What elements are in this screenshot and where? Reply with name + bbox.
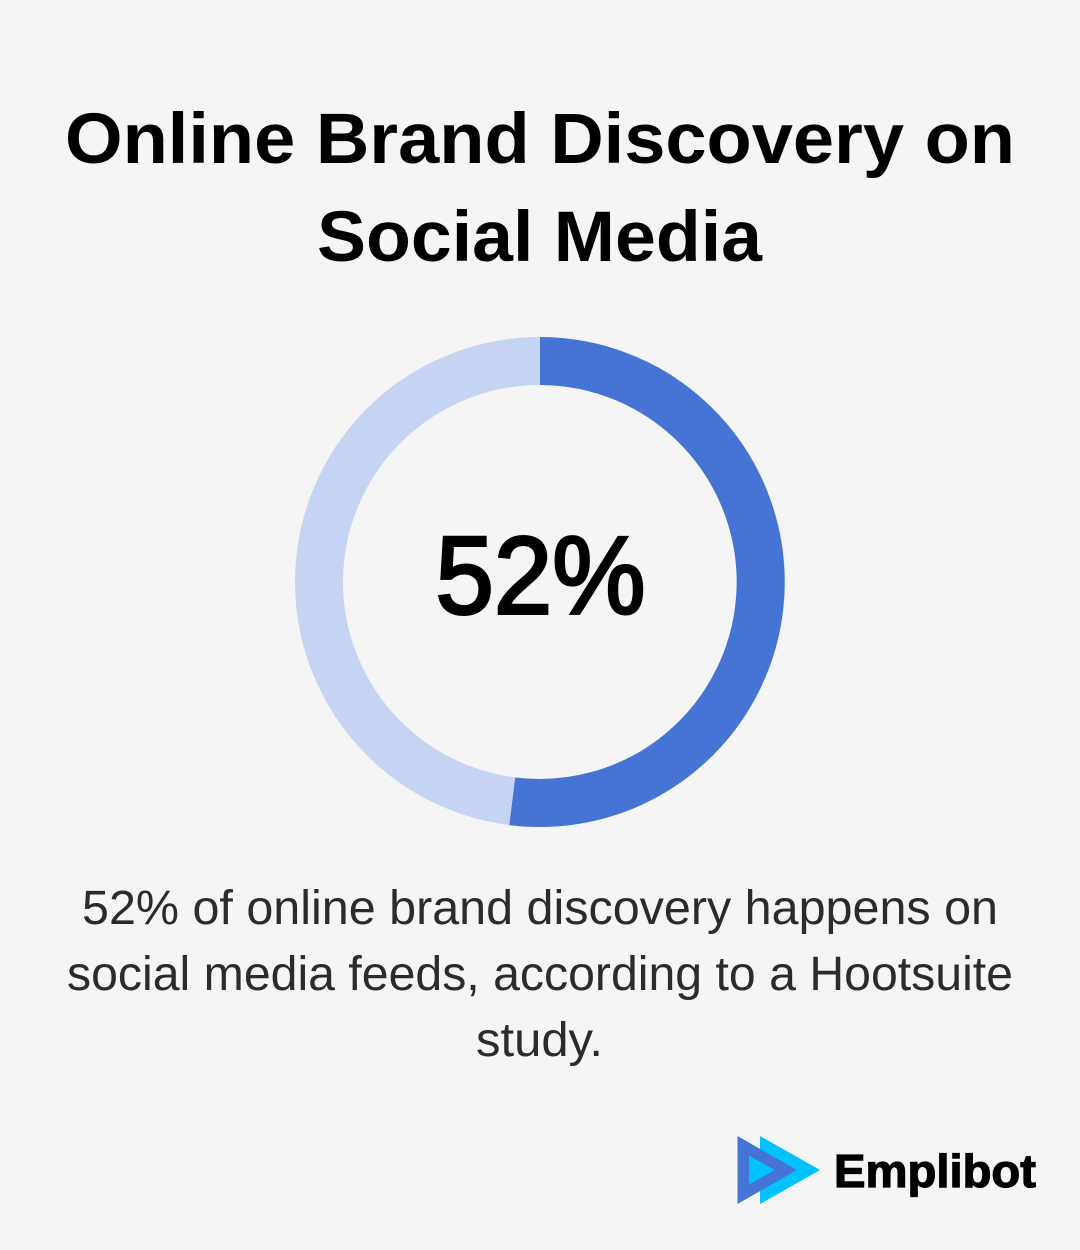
description text: 52% of online brand discovery happens on [82, 882, 998, 935]
title: Social Media [317, 198, 763, 277]
description text [67, 882, 1013, 1067]
donut centre value: 52% [436, 514, 646, 638]
Emplibot logo [738, 1136, 1036, 1204]
title [65, 100, 1015, 277]
donut chart: 52% [319, 361, 761, 803]
description text: study. [476, 1014, 603, 1067]
donut track [319, 361, 761, 803]
logo wordmark: Emplibot [834, 1145, 1036, 1197]
title: Online Brand Discovery on [65, 100, 1015, 179]
logo icon [738, 1136, 820, 1204]
description text: social media feeds, according to a Hootsuite [67, 948, 1013, 1001]
donut value arc [512, 361, 761, 803]
